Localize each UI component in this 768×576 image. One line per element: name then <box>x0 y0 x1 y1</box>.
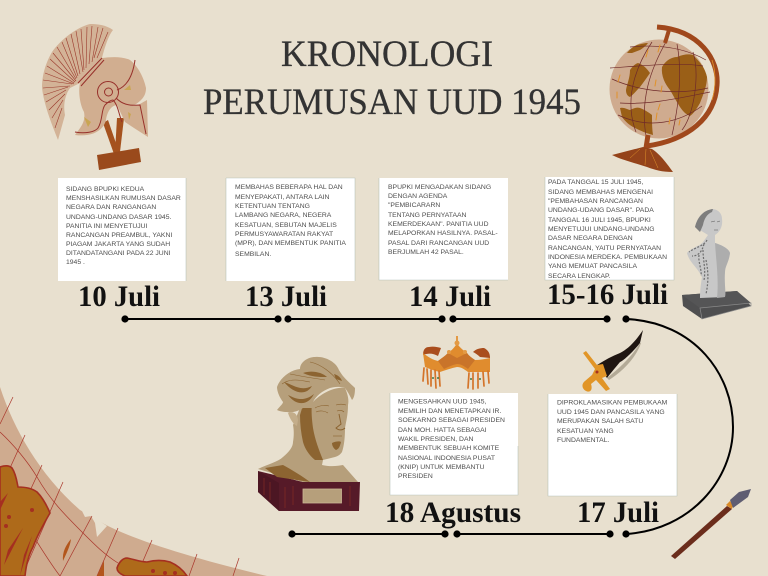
title: PERUMUSAN UUD 1945 <box>203 82 581 123</box>
panel: 15-16 Juli <box>545 177 674 280</box>
panel: 18 Agustus: MENGESAHKAN UUD 1945, <box>398 398 486 406</box>
panel: 14 Juli: BERJUMLAH 42 PASAL. <box>388 249 464 256</box>
panel: 15-16 Juli: PADA TANGGAL 15 JULI 1945, <box>548 179 643 186</box>
panel: 13 Juli: MENYEPAKATI, ANTARA LAIN <box>235 194 330 201</box>
panel: 18 Agustus: SOEKARNO SEBAGAI PRESIDEN <box>398 417 505 424</box>
title: KRONOLOGI <box>281 34 493 75</box>
panel: 10 Juli: RANCANGAN PREAMBUL, YAKNI <box>66 232 172 239</box>
title <box>203 34 581 123</box>
panel: 13 Juli: PERMUSYAWARATAN RAKYAT <box>235 231 333 238</box>
panel: 15-16 Juli: TANGGAL 16 JULI 1945, BPUPKI <box>548 217 651 224</box>
date: 18 Agustus: 18 Agustus <box>385 496 521 529</box>
panel: 18 Agustus: (KNIP) UNTUK MEMBANTU <box>398 464 485 471</box>
panel: 13 Juli <box>226 178 355 281</box>
date: 14 Juli: 14 Juli <box>409 280 491 313</box>
panel: 10 Juli: MENSHASILKAN RUMUSAN DASAR <box>66 195 181 202</box>
panel: 10 Juli: SIDANG BPUPKI KEDUA <box>66 186 145 193</box>
panel: 17 Juli: DIPROKLAMASIKAN PEMBUKAAM <box>557 400 668 406</box>
icon: woman bust <box>258 357 360 511</box>
panel: 17 Juli: FUNDAMENTAL. <box>557 437 609 444</box>
panel: 17 Juli: KESATUAN YANG <box>557 428 614 435</box>
panel: 10 Juli: PIAGAM JAKARTA YANG SUDAH <box>66 241 170 248</box>
panel: 13 Juli: SEMBILAN. <box>235 251 271 258</box>
icon: spear <box>671 489 751 559</box>
panel: 15-16 Juli: UNDANG-UDANG DASAR". PADA <box>548 207 654 214</box>
panel: 10 Juli: 1945 . <box>66 259 85 266</box>
icon: roman helmet <box>42 24 148 170</box>
panel: 10 Juli: PANITIA INI MENYETUJUI <box>66 223 148 230</box>
panel: 14 Juli: BPUPKI MENGADAKAN SIDANG <box>388 184 491 191</box>
panel: 18 Agustus: MEMBENTUK SEBUAH KOMITE <box>398 445 500 452</box>
date: 13 Juli: 13 Juli <box>245 280 327 313</box>
panel: 13 Juli: (MPR), DAN MEMBENTUK PANITIA <box>235 240 346 247</box>
panel: 10 Juli <box>58 178 186 281</box>
panel: 18 Agustus: DAN MOH. HATTA SEBAGAI <box>398 427 487 434</box>
panel: 17 Juli: UUD 1945 DAN PANCASILA YANG <box>557 409 665 416</box>
panel: 14 Juli: TENTANG PERNYATAAN <box>388 212 467 219</box>
panel: 18 Agustus <box>390 393 518 495</box>
date: 15-16 Juli: 15-16 Juli <box>547 278 668 311</box>
panel: 18 Agustus: PRESIDEN <box>398 473 433 480</box>
arrow: curved connector <box>626 319 733 534</box>
date: 17 Juli: 17 Juli <box>577 496 659 529</box>
panel: 17 Juli: MERUPAKAN SALAH SATU <box>557 418 643 425</box>
panel: 15-16 Juli: SIDANG MEMBAHAS MENGENAI <box>548 189 653 196</box>
panel: 15-16 Juli: DASAR NEGARA DENGAN <box>548 235 633 242</box>
panel: 15-16 Juli: INDONESIA MERDEKA. PEMBUKAAN <box>548 254 667 261</box>
panel: 10 Juli: UNDANG-UNDANG DASAR 1945. <box>66 214 171 221</box>
panel: 14 Juli: DENGAN AGENDA <box>388 193 448 200</box>
icon: keris sword <box>582 330 643 392</box>
date: 10 Juli: 10 Juli <box>78 280 160 313</box>
timeline: lower <box>289 531 629 537</box>
panel: 15-16 Juli: "PEMBAHASAN RANCANGAN <box>548 198 643 205</box>
panel: 14 Juli: PASAL DARI RANCANGAN UUD <box>388 240 489 247</box>
panel: 15-16 Juli: SECARA LENGKAP. <box>548 273 611 280</box>
panel: 14 Juli: "PEMBICARARN <box>388 202 440 209</box>
panel: 14 Juli <box>379 178 508 280</box>
panel: 18 Agustus: MEMILIH DAN MENETAPKAN IR. <box>398 408 501 415</box>
panel: 13 Juli: KESATUAN, SEBUTAN MAJELIS <box>235 222 337 229</box>
panel: 15-16 Juli: RANCANGAN, YAITU PERNYATAAN <box>548 245 661 252</box>
panel: 10 Juli: DITANDATANGANI PADA 22 JUNI <box>66 250 171 257</box>
panel: 13 Juli: LAMBANG NEGARA, NEGERA <box>235 212 332 219</box>
icon: crown <box>423 336 490 389</box>
panel: 14 Juli: KEMERDEKAAN". PANITIA UUD <box>388 221 489 228</box>
panel: 13 Juli: KETENTUAN TENTANG <box>235 203 310 210</box>
map decoration: bottom-left corner <box>0 387 267 576</box>
panel: 15-16 Juli: YANG MEMUAT PANCASILA <box>548 263 637 270</box>
panel: 18 Agustus: NASIONAL INDONESIA PUSAT <box>398 455 495 462</box>
panel: 14 Juli: MELAPORKAN HASILNYA. PASAL- <box>388 230 498 237</box>
panel: 17 Juli <box>548 394 677 496</box>
panel: 10 Juli: NEGARA DAN RANGANGAN <box>66 204 156 211</box>
panel: 15-16 Juli: MENYETUJUI UNDANG-UNDANG <box>548 226 654 233</box>
panel: 18 Agustus: WAKIL PRESIDEN, DAN <box>398 436 474 443</box>
timeline: upper <box>122 316 629 322</box>
panel: 13 Juli: MEMBAHAS BEBERAPA HAL DAN <box>235 184 343 191</box>
icon: small grey bust <box>682 209 751 319</box>
icon: globe <box>610 27 717 172</box>
